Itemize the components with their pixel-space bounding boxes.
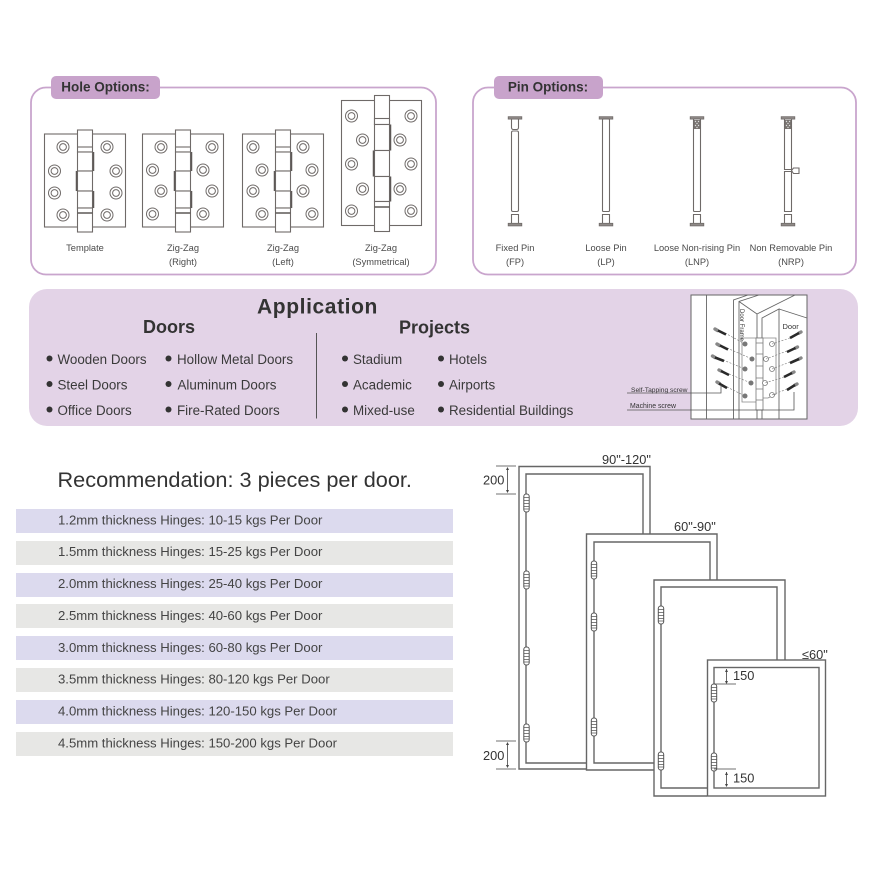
diagram: screw installation: Machine screw — [630, 403, 676, 410]
hinge: zig-zag symmetrical: (Symmetrical) — [352, 257, 410, 267]
hinge: zig-zag symmetrical: Zig-Zag — [365, 243, 397, 253]
door: 90-120 inch — [519, 452, 651, 769]
pin: loose: Loose Pin — [585, 243, 627, 253]
diagram: screw installation: Self-Tapping screw — [631, 387, 688, 394]
table: thickness recommendations: 3.5mm thickness Hinges: 80-120 kgs Per Door — [58, 672, 330, 686]
pin: loose non-rising: (LNP) — [685, 257, 709, 267]
door: up to 60 inch — [708, 647, 828, 796]
list: projects: Airports — [449, 378, 495, 392]
hinge: template: Template — [66, 243, 104, 253]
table: thickness recommendations: 1.2mm thickness Hinges: 10-15 kgs Per Door — [58, 512, 323, 528]
hinge: zig-zag right: (Right) — [169, 257, 197, 267]
dimension: 150 bottom — [714, 769, 754, 787]
hinge: zig-zag right — [142, 130, 224, 267]
list: doors: Hollow Metal Doors — [177, 352, 293, 367]
heading: recommendation: Recommendation: 3 pieces per door. — [58, 467, 412, 492]
list: doors: Wooden Doors — [58, 352, 147, 367]
heading: doors: Doors — [143, 317, 195, 337]
diagram: door sizes — [483, 452, 828, 796]
table: thickness recommendations — [16, 509, 453, 756]
panel: hole options — [31, 76, 436, 274]
hinge: zig-zag left: Zig-Zag — [267, 243, 299, 253]
divider between doors and projects — [316, 333, 317, 418]
list: projects: Hotels — [449, 352, 487, 367]
pin: non removable: (NRP) — [778, 257, 804, 267]
diagram: screw installation — [627, 295, 807, 419]
pin: non removable: Non Removable Pin — [750, 243, 832, 253]
pin: fixed — [496, 117, 534, 267]
dimension: 200 top — [483, 466, 516, 494]
list: doors: Fire-Rated Doors — [177, 403, 280, 418]
heading: pin options: Pin Options: — [508, 80, 588, 94]
hinge: zig-zag left: (Left) — [272, 257, 294, 267]
table: thickness recommendations: 3.0mm thickness Hinges: 60-80 kgs Per Door — [58, 640, 323, 655]
dimension: 200 bottom — [483, 741, 516, 769]
panel: application — [29, 289, 858, 426]
heading: application: Application — [257, 296, 378, 318]
table: thickness recommendations: 4.5mm thickness Hinges: 150-200 kgs Per Door — [58, 736, 338, 750]
door: 60-90 inch — [586, 519, 717, 770]
heading: hole options: Hole Options: — [61, 80, 150, 94]
list: projects: Residential Buildings — [449, 403, 574, 418]
hinge: zig-zag symmetrical — [342, 96, 422, 267]
table: thickness recommendations: 4.0mm thickness Hinges: 120-150 kgs Per Door — [58, 704, 338, 718]
heading: pin options — [494, 76, 603, 99]
list: doors: Steel Doors — [58, 378, 128, 392]
dimension: 150 bottom: 150 — [733, 770, 754, 786]
pin: fixed: (FP) — [506, 257, 524, 267]
pin: loose: (LP) — [597, 257, 615, 267]
list: projects — [342, 352, 574, 418]
list: doors: Aluminum Doors — [178, 378, 277, 392]
pin: loose non-rising: Loose Non-rising Pin — [654, 243, 740, 253]
diagram: screw installation: Door Frame — [738, 309, 744, 342]
pin: loose non-rising — [654, 117, 740, 267]
list: projects: Stadium — [353, 352, 402, 367]
dimension: 150 top: 150 — [733, 668, 754, 683]
list: projects: Academic — [353, 378, 412, 392]
list: doors — [46, 352, 293, 418]
diagram: screw installation: Door — [782, 322, 799, 331]
heading: projects: Projects — [399, 318, 470, 338]
table: thickness recommendations: 2.0mm thickness Hinges: 25-40 kgs Per Door — [58, 576, 323, 591]
dimension: 150 top — [714, 668, 754, 684]
door: 90-120 inch: 90"-120" — [602, 452, 651, 467]
hinge: zig-zag left — [242, 130, 324, 267]
hinge: template — [44, 130, 126, 253]
door: up to 60 inch: ≤60" — [802, 647, 828, 662]
hinge: zig-zag right: Zig-Zag — [167, 243, 199, 253]
table: thickness recommendations: 2.5mm thickness Hinges: 40-60 kgs Per Door — [58, 608, 323, 623]
table: thickness recommendations: 1.5mm thickness Hinges: 15-25 kgs Per Door — [58, 544, 323, 559]
dimension: 200 top: 200 — [483, 472, 504, 488]
list: projects: Mixed-use — [353, 403, 415, 418]
pin: non removable — [750, 117, 832, 267]
door: 60-90 inch: 60"-90" — [674, 519, 716, 534]
pin: loose — [585, 117, 627, 267]
panel: pin options — [473, 76, 856, 274]
door: intermediate — [654, 580, 785, 796]
pin: fixed: Fixed Pin — [496, 243, 534, 253]
dimension: 200 bottom: 200 — [483, 748, 504, 763]
heading: hole options — [51, 76, 160, 99]
list: doors: Office Doors — [58, 403, 132, 418]
